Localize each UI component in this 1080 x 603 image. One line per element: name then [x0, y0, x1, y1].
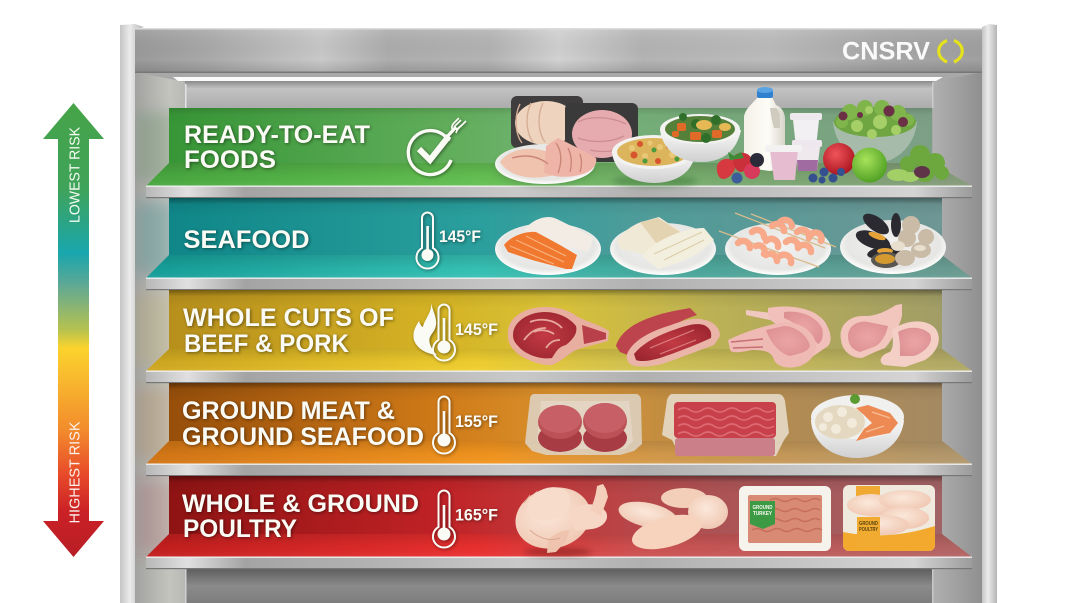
- package label: ground chicken: POULTRY: [859, 527, 879, 533]
- temperature: 145F: 145°F: [439, 228, 481, 246]
- label: lowest risk: LOWEST RISK: [66, 127, 84, 223]
- shelf 1: ready-to-eat foods: [146, 87, 972, 198]
- food: shrimp skewer plate: [719, 213, 836, 275]
- light strip: [173, 77, 943, 81]
- food: bowl of ground meat and seafood: [811, 394, 904, 458]
- heading: whole cuts of beef and pork: WHOLE CUTS OF: [183, 304, 394, 332]
- shelf 3 colored back and floor: [146, 290, 972, 371]
- food: pork rib chops: [728, 307, 831, 368]
- food: burger patties in tray: [525, 394, 642, 455]
- food: white fish plate: [610, 217, 716, 275]
- icon: logo brackets: [939, 40, 962, 62]
- temperature: 165F: 165°F: [455, 506, 498, 524]
- heading: ground meat and ground seafood: GROUND SEAFOOD: [182, 423, 424, 451]
- package label: ground turkey: GROUND: [752, 505, 773, 511]
- package label: ground chicken: GROUND: [859, 521, 878, 527]
- food: mussels and clams plate: [840, 210, 946, 274]
- heading: whole and ground poultry: WHOLE & GROUND: [182, 490, 419, 518]
- food: milk jug: [744, 87, 785, 171]
- shelf 4 colored back and floor: [146, 383, 972, 464]
- shelf 4: ground meat and ground seafood: [146, 383, 972, 476]
- icon: thermometer 145F: [416, 212, 438, 269]
- food: ribeye steak: [508, 307, 609, 365]
- risk arrow: [43, 103, 104, 557]
- icon: check mark and fork: [408, 118, 466, 175]
- food: ground turkey package: [739, 486, 831, 551]
- heading: ready-to-eat foods: READY-TO-EAT: [184, 121, 370, 149]
- heading: whole and ground poultry: POULTRY: [183, 515, 297, 543]
- icon: thermometer 165F: [433, 491, 455, 548]
- label: highest risk: HIGHEST RISK: [66, 422, 84, 524]
- shelf 1 colored back and floor: [146, 108, 972, 186]
- food: apples and blueberries: [808, 143, 887, 184]
- food: pasta bowl: [612, 135, 697, 187]
- food: salad bowl: [833, 100, 917, 163]
- heading: ground meat and ground seafood: [182, 397, 424, 451]
- food: strip steaks: [616, 308, 720, 367]
- refrigerator cabinet frame: [120, 24, 997, 603]
- icon: thermometer 155F: [433, 396, 455, 454]
- food: salmon plate: [495, 217, 601, 275]
- temperature: 155F: 155°F: [455, 413, 498, 431]
- food: chicken pieces: [616, 488, 728, 556]
- food: vegetable bowl: [660, 113, 741, 162]
- shelf 5 colored back and floor: [146, 476, 972, 557]
- header band with brand: [135, 28, 982, 81]
- shelf 2: seafood: [146, 198, 972, 290]
- shelf 2 colored back and floor: [146, 198, 972, 278]
- food: deli ham trays: [511, 96, 638, 162]
- heading: ground meat and ground seafood: GROUND MEAT &: [182, 397, 395, 425]
- food: whole chicken: [509, 479, 608, 557]
- food: pork loin chops: [841, 304, 939, 367]
- heading: whole cuts of beef and pork: [183, 304, 394, 358]
- icon: flame and thermometer: [413, 303, 455, 361]
- food: yogurt cups: [765, 113, 822, 180]
- package label: ground turkey: [750, 501, 775, 529]
- shelf 5: whole and ground poultry: [146, 476, 972, 569]
- shelf 3: whole cuts of beef and pork: [146, 290, 972, 383]
- package label: ground chicken: [857, 517, 880, 547]
- shelf 4 metal lip: [146, 464, 972, 476]
- food: ground meat in tray: [662, 394, 789, 456]
- heading: whole cuts of beef and pork: BEEF & PORK: [184, 330, 349, 358]
- left post: [120, 24, 144, 603]
- right post: [982, 24, 997, 603]
- heading: ready-to-eat foods: FOODS: [184, 146, 276, 174]
- shelf 3 metal lip: [146, 370, 972, 383]
- heading: ready-to-eat foods: [184, 121, 370, 174]
- heading: seafood: SEAFOOD: [184, 226, 310, 254]
- temperature: 145F: 145°F: [455, 321, 498, 339]
- shelf 1 metal lip: [146, 186, 972, 198]
- shelf 5 metal lip: [146, 556, 972, 569]
- food: ham plate: [495, 138, 596, 186]
- food: ground chicken package: [843, 485, 935, 551]
- package label: ground turkey: TURKEY: [753, 511, 773, 517]
- food: berries: [717, 152, 764, 184]
- logo: CNSRV: CNSRV: [842, 38, 930, 66]
- heading: whole and ground poultry: [182, 490, 419, 543]
- food: loose lettuce: [887, 145, 949, 182]
- shelf 2 metal lip: [146, 278, 972, 290]
